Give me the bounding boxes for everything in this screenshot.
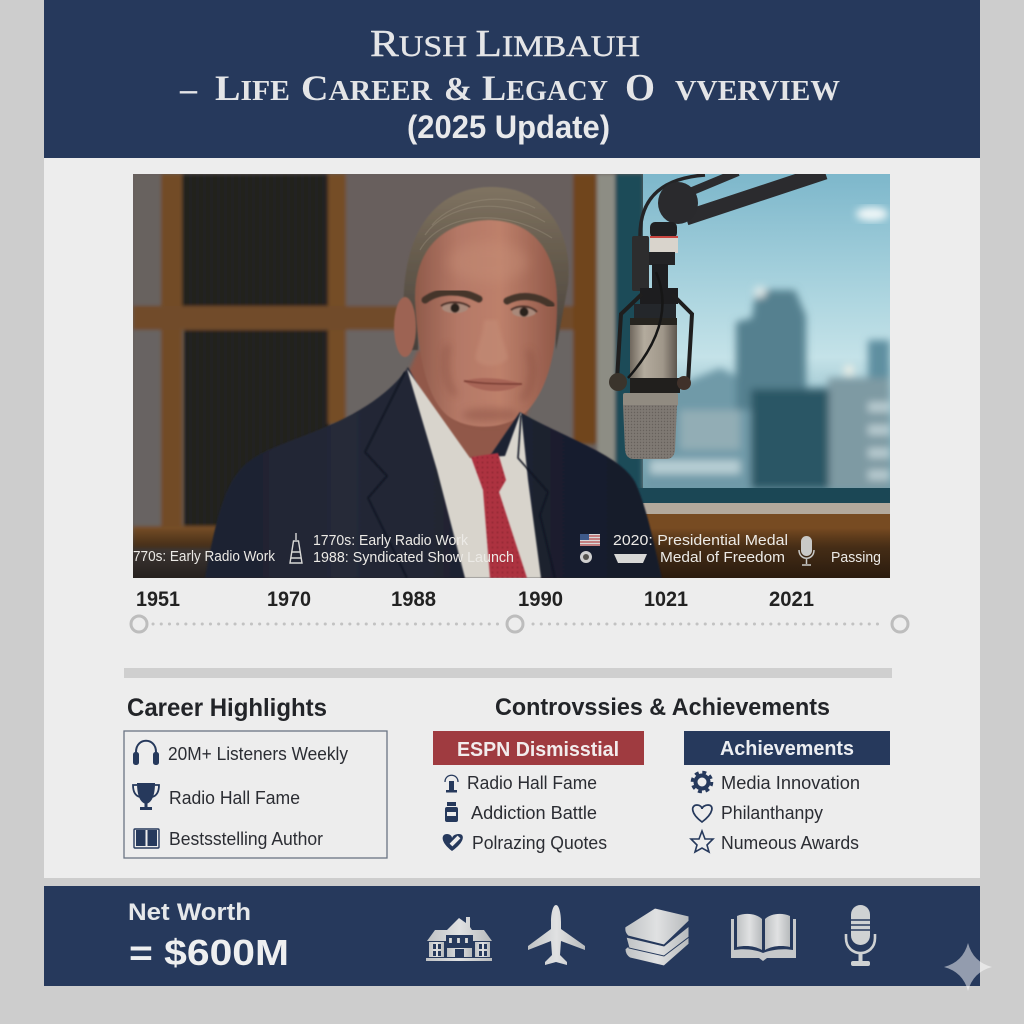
timeline — [131, 588, 908, 632]
photo timeline captions: Medal of Freedom — [660, 550, 785, 566]
item: awards: Numeous Awards — [721, 833, 859, 853]
title line 2: VVERVIEW — [675, 76, 840, 107]
forehead highlight — [458, 254, 523, 270]
header band — [44, 0, 980, 158]
icon: trophy — [133, 783, 159, 810]
title line 3: (2025 Update) — [407, 109, 610, 145]
heading: controversies and achievements: Controvssies & Achievements — [495, 694, 830, 721]
photo timeline captions: 1988: Syndicated Show Launch — [313, 550, 514, 566]
net worth value: = $600M — [129, 932, 289, 973]
title line 2: – — [179, 71, 198, 108]
item: radio hall fame: Radio Hall Fame — [467, 773, 597, 793]
photo timeline captions — [133, 533, 881, 566]
photo timeline captions: Passing — [831, 550, 881, 566]
title line 2 — [179, 67, 840, 109]
icon: heart — [693, 805, 712, 822]
icon: open book — [731, 914, 796, 961]
title line 2: LEGACY — [482, 68, 608, 108]
timeline years: 1970 — [267, 588, 311, 611]
portrait photo panel — [133, 172, 890, 578]
title line 2: O — [625, 67, 655, 109]
timeline dotted track — [131, 616, 908, 632]
controversies banner — [433, 731, 644, 765]
controversies banner: ESPN Dismisstial — [457, 739, 619, 761]
panel: career highlights — [124, 694, 387, 858]
decorative sparkle — [944, 943, 992, 991]
icon: star — [691, 831, 713, 852]
icon: small microphone — [799, 536, 814, 565]
face — [415, 220, 557, 427]
title line 2: & — [444, 71, 472, 108]
panel: controversies and achievements — [433, 694, 890, 853]
achievements banner — [684, 731, 890, 765]
studio microphone — [609, 172, 825, 459]
item: media innovation: Media Innovation — [721, 773, 860, 793]
ear — [394, 297, 416, 357]
timeline years: 1990 — [518, 588, 563, 611]
timeline years: 1988 — [391, 588, 436, 611]
cheek shadows — [445, 345, 532, 422]
icon: radio tower small — [445, 775, 458, 792]
suit jacket — [205, 367, 662, 578]
shirt collar — [407, 369, 541, 578]
net worth label: Net Worth — [128, 899, 251, 926]
icon: ribbon — [614, 554, 647, 563]
timeline years: 2021 — [769, 588, 814, 611]
timeline years — [136, 588, 814, 611]
footer band — [44, 886, 980, 986]
item: philanthropy: Philanthanpy — [721, 803, 823, 823]
icon: gear — [692, 772, 712, 792]
icon: footer microphone — [846, 905, 875, 966]
item: polarizing quotes: Polrazing Quotes — [472, 833, 607, 853]
icon: book — [134, 829, 159, 848]
timeline years: 1951 — [136, 588, 180, 611]
eyes — [441, 302, 537, 317]
highlight: hall of fame: Radio Hall Fame — [169, 788, 300, 808]
hair strands — [420, 199, 552, 250]
bottom caption shade — [133, 528, 890, 578]
eyebrows — [425, 292, 551, 305]
portrait of man in suit — [205, 187, 662, 578]
icon: headphones — [133, 741, 159, 765]
title line 1: RUSH LIMBAUH — [370, 23, 640, 65]
title line 2: LIFE — [215, 68, 290, 108]
photo timeline captions: 770s: Early Radio Work — [133, 549, 276, 565]
icon: pill bottle — [445, 802, 458, 822]
icon: stacked books — [625, 908, 689, 966]
title line 2: CAREER — [301, 68, 433, 108]
necktie — [471, 453, 527, 578]
heading: career highlights: Career Highlights — [127, 694, 327, 722]
studio wall and wood frames — [133, 174, 643, 548]
jacket lapel lines — [365, 372, 555, 578]
nose — [478, 324, 506, 363]
achievements banner: Achievements — [720, 738, 854, 760]
content panel — [44, 158, 980, 878]
icon: radio tower — [290, 533, 302, 563]
icon: broken heart — [443, 834, 463, 851]
icon: flag medal — [580, 534, 600, 563]
photo timeline captions: 1770s: Early Radio Work — [313, 533, 469, 549]
window with blurred skyline — [615, 174, 890, 578]
photo timeline captions: 2020: Presidential Medal — [613, 533, 788, 549]
mouth — [464, 378, 522, 391]
section divider bar — [124, 668, 892, 678]
neck — [409, 350, 529, 458]
highlights box — [124, 731, 387, 858]
highlight: author: Bestsstelling Author — [169, 829, 323, 849]
icon: airplane — [528, 905, 585, 965]
hair — [404, 187, 569, 350]
item: addiction battle: Addiction Battle — [471, 803, 597, 823]
highlight: listeners: 20M+ Listeners Weekly — [168, 744, 348, 764]
timeline years: 1021 — [644, 588, 688, 611]
icon: mansion — [426, 917, 492, 961]
